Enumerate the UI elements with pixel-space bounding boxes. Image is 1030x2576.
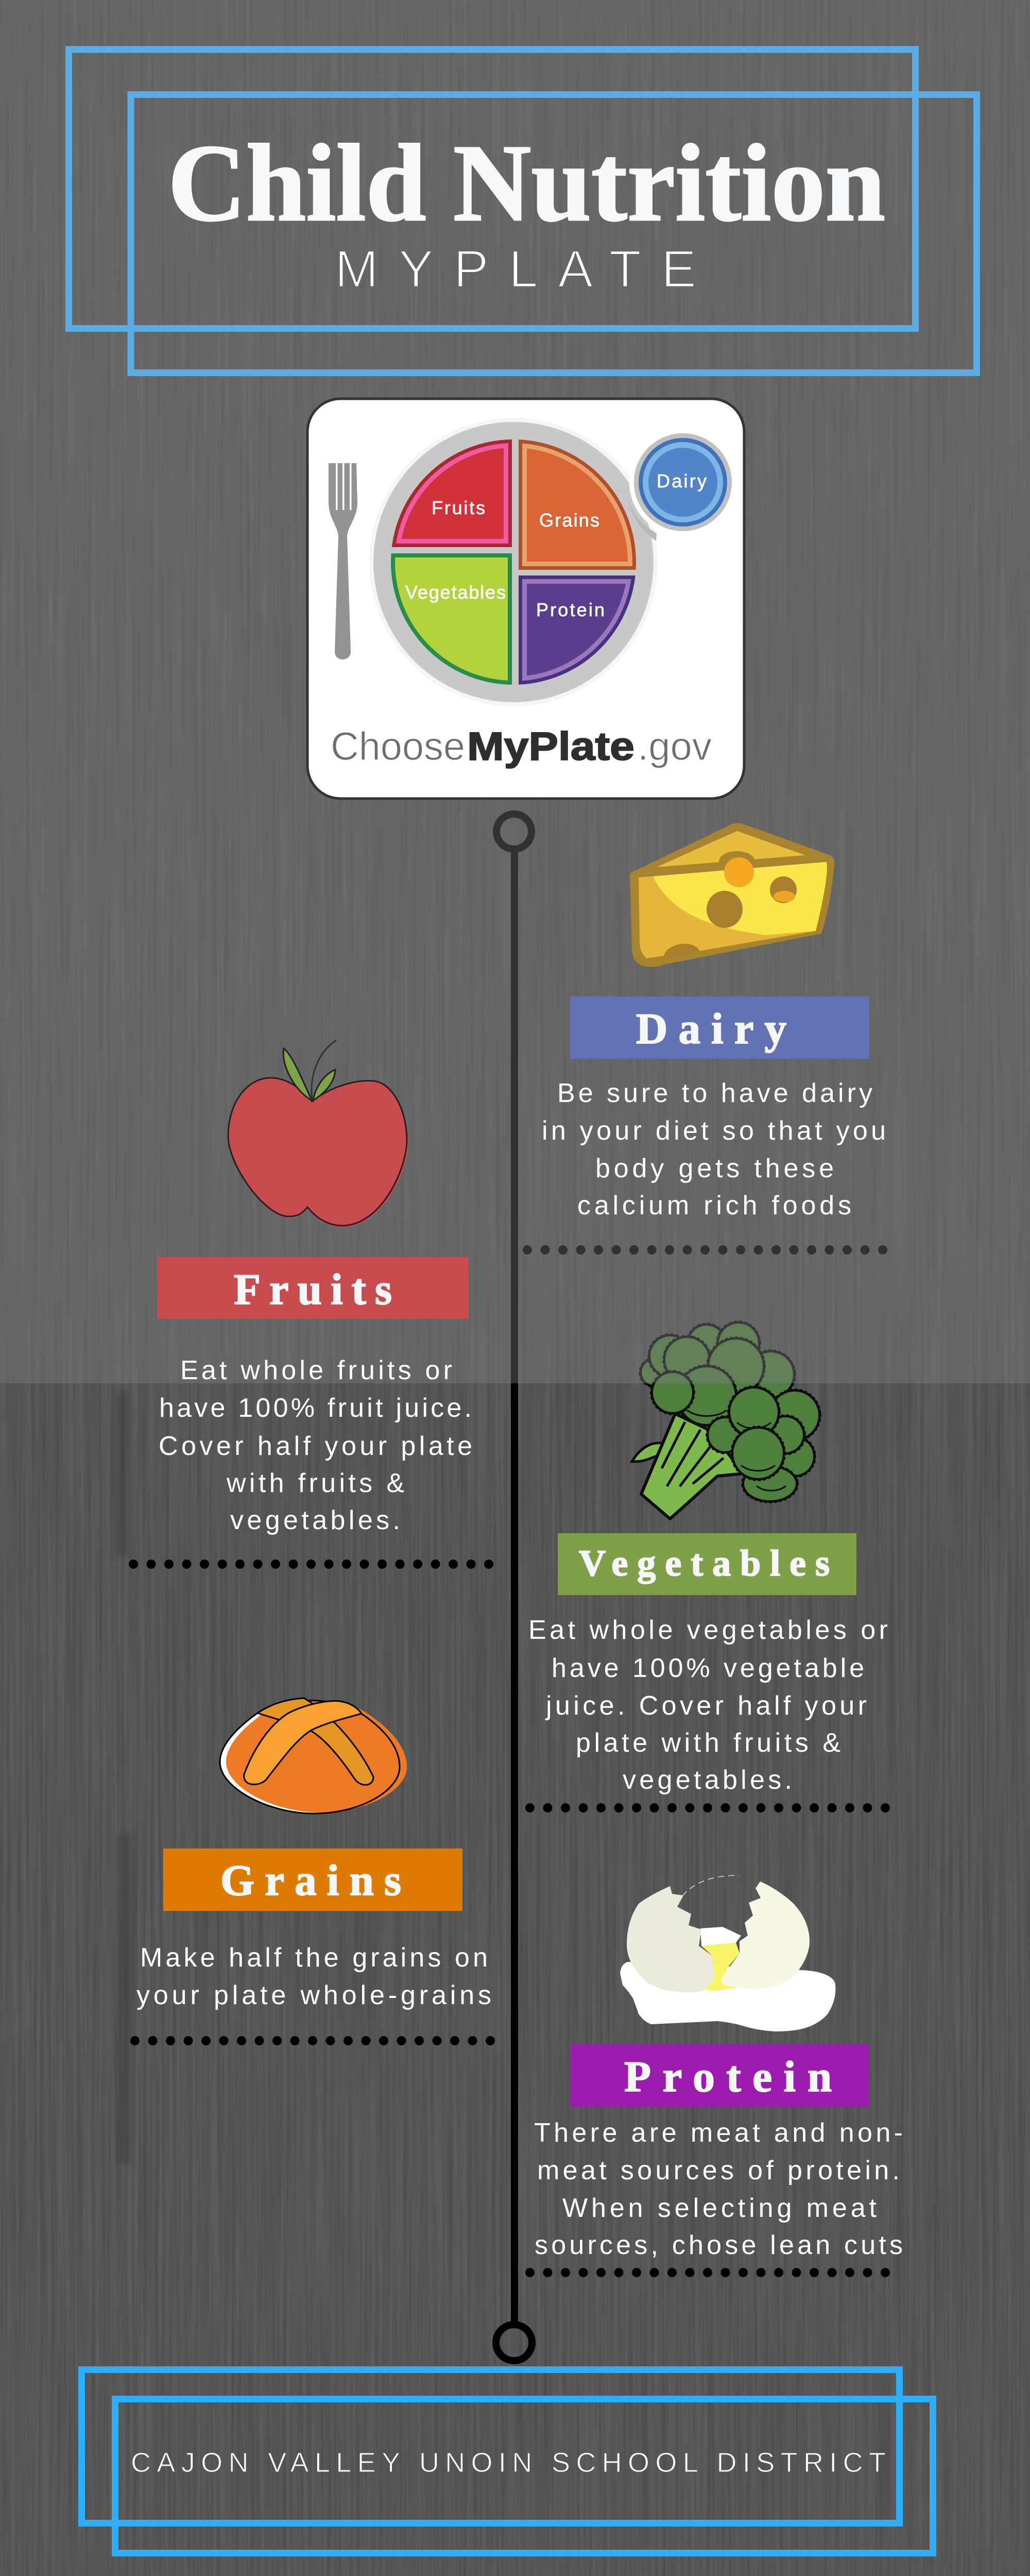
text: protein: sources, chose lean cuts — [535, 2230, 903, 2260]
text: vegetables: juice. Cover half your — [545, 1691, 867, 1721]
icon: apple — [228, 1040, 408, 1227]
text: fruits: with fruits & — [226, 1468, 404, 1498]
panel: grains — [135, 1849, 491, 2041]
plate section: vegetables: Vegetables — [405, 582, 506, 603]
text: fruits: vegetables. — [230, 1505, 400, 1535]
dairy cup — [627, 429, 736, 541]
panel: dairy — [542, 996, 886, 1221]
label: fruits — [157, 1257, 469, 1319]
label: protein: Protein — [624, 2053, 832, 2101]
label: dairy: Dairy — [636, 1005, 786, 1053]
plate section: grains: Grains — [539, 510, 599, 531]
text: dairy: in your diet so that you — [542, 1116, 886, 1146]
subtitle: MYPLATE — [335, 240, 696, 298]
text: fruits — [159, 1355, 472, 1535]
label: fruits: Fruits — [234, 1265, 392, 1314]
label: dairy — [570, 996, 869, 1059]
title: Child Nutrition — [168, 122, 885, 244]
label: grains — [163, 1849, 462, 1911]
panel: vegetables — [528, 1533, 888, 1808]
logo wordmark: .gov — [638, 724, 712, 769]
text: vegetables: Eat whole vegetables or — [528, 1615, 888, 1645]
footer frames — [81, 2370, 933, 2553]
label: vegetables: Vegetables — [579, 1543, 830, 1584]
plate section: protein — [519, 575, 636, 685]
text: protein — [534, 2118, 903, 2260]
timeline line and end rings — [496, 814, 532, 2361]
logo wordmark: MyPlate — [467, 724, 634, 769]
label: grains: Grains — [220, 1856, 401, 1905]
text: dairy: Be sure to have dairy — [557, 1078, 872, 1108]
divider: grains dots — [135, 2036, 491, 2045]
text: fruits: have 100% fruit juice. — [159, 1393, 472, 1423]
text: grains: Make half the grains on — [140, 1943, 488, 1973]
header frames — [69, 49, 976, 373]
text: dairy — [542, 1078, 886, 1221]
icon: fork — [329, 461, 357, 659]
plate section: fruits — [392, 439, 512, 547]
icon: broccoli — [632, 1324, 818, 1519]
dairy cup: Dairy — [657, 470, 707, 492]
icon: cheese — [630, 823, 834, 967]
divider: fruits dots — [133, 1560, 490, 1569]
text: protein: There are meat and non- — [534, 2118, 903, 2148]
footer text: CAJON VALLEY UNOIN SCHOOL DISTRICT — [131, 2447, 886, 2478]
text: vegetables: vegetables. — [623, 1765, 792, 1795]
label: vegetables — [558, 1533, 856, 1595]
label: protein — [570, 2044, 869, 2107]
plate section: protein: Protein — [536, 599, 605, 620]
divider: vegetables dots — [530, 1803, 886, 1812]
panel: fruits — [157, 1257, 472, 1535]
text: fruits: Cover half your plate — [159, 1431, 472, 1461]
text: grains: your plate whole-grains — [136, 1980, 491, 2010]
text: vegetables — [528, 1615, 888, 1795]
plate — [369, 418, 658, 706]
text: dairy: calcium rich foods — [577, 1191, 851, 1221]
plate section: vegetables — [391, 553, 512, 685]
panel: protein — [530, 2044, 903, 2273]
icon: bread — [220, 1698, 407, 1814]
text: vegetables: plate with fruits & — [576, 1728, 840, 1758]
logo wordmark: Choose — [331, 724, 465, 769]
logo wordmark — [331, 724, 712, 769]
divider: protein dots — [530, 2268, 886, 2277]
text: protein: When selecting meat — [562, 2193, 877, 2223]
tone overlay on upper half — [0, 0, 1030, 1383]
text: grains — [136, 1943, 491, 2010]
divider: dairy dots — [527, 1245, 884, 1255]
icon: cracked egg — [620, 1875, 835, 2031]
text: fruits: Eat whole fruits or — [180, 1355, 452, 1385]
text: protein: meat sources of protein. — [537, 2156, 900, 2185]
text: dairy: body gets these — [595, 1154, 834, 1183]
plate section: grains — [519, 439, 636, 570]
panel: MyPlate logo card — [307, 399, 744, 799]
text: vegetables: have 100% vegetable — [552, 1653, 864, 1683]
plate section: fruits: Fruits — [432, 497, 485, 518]
